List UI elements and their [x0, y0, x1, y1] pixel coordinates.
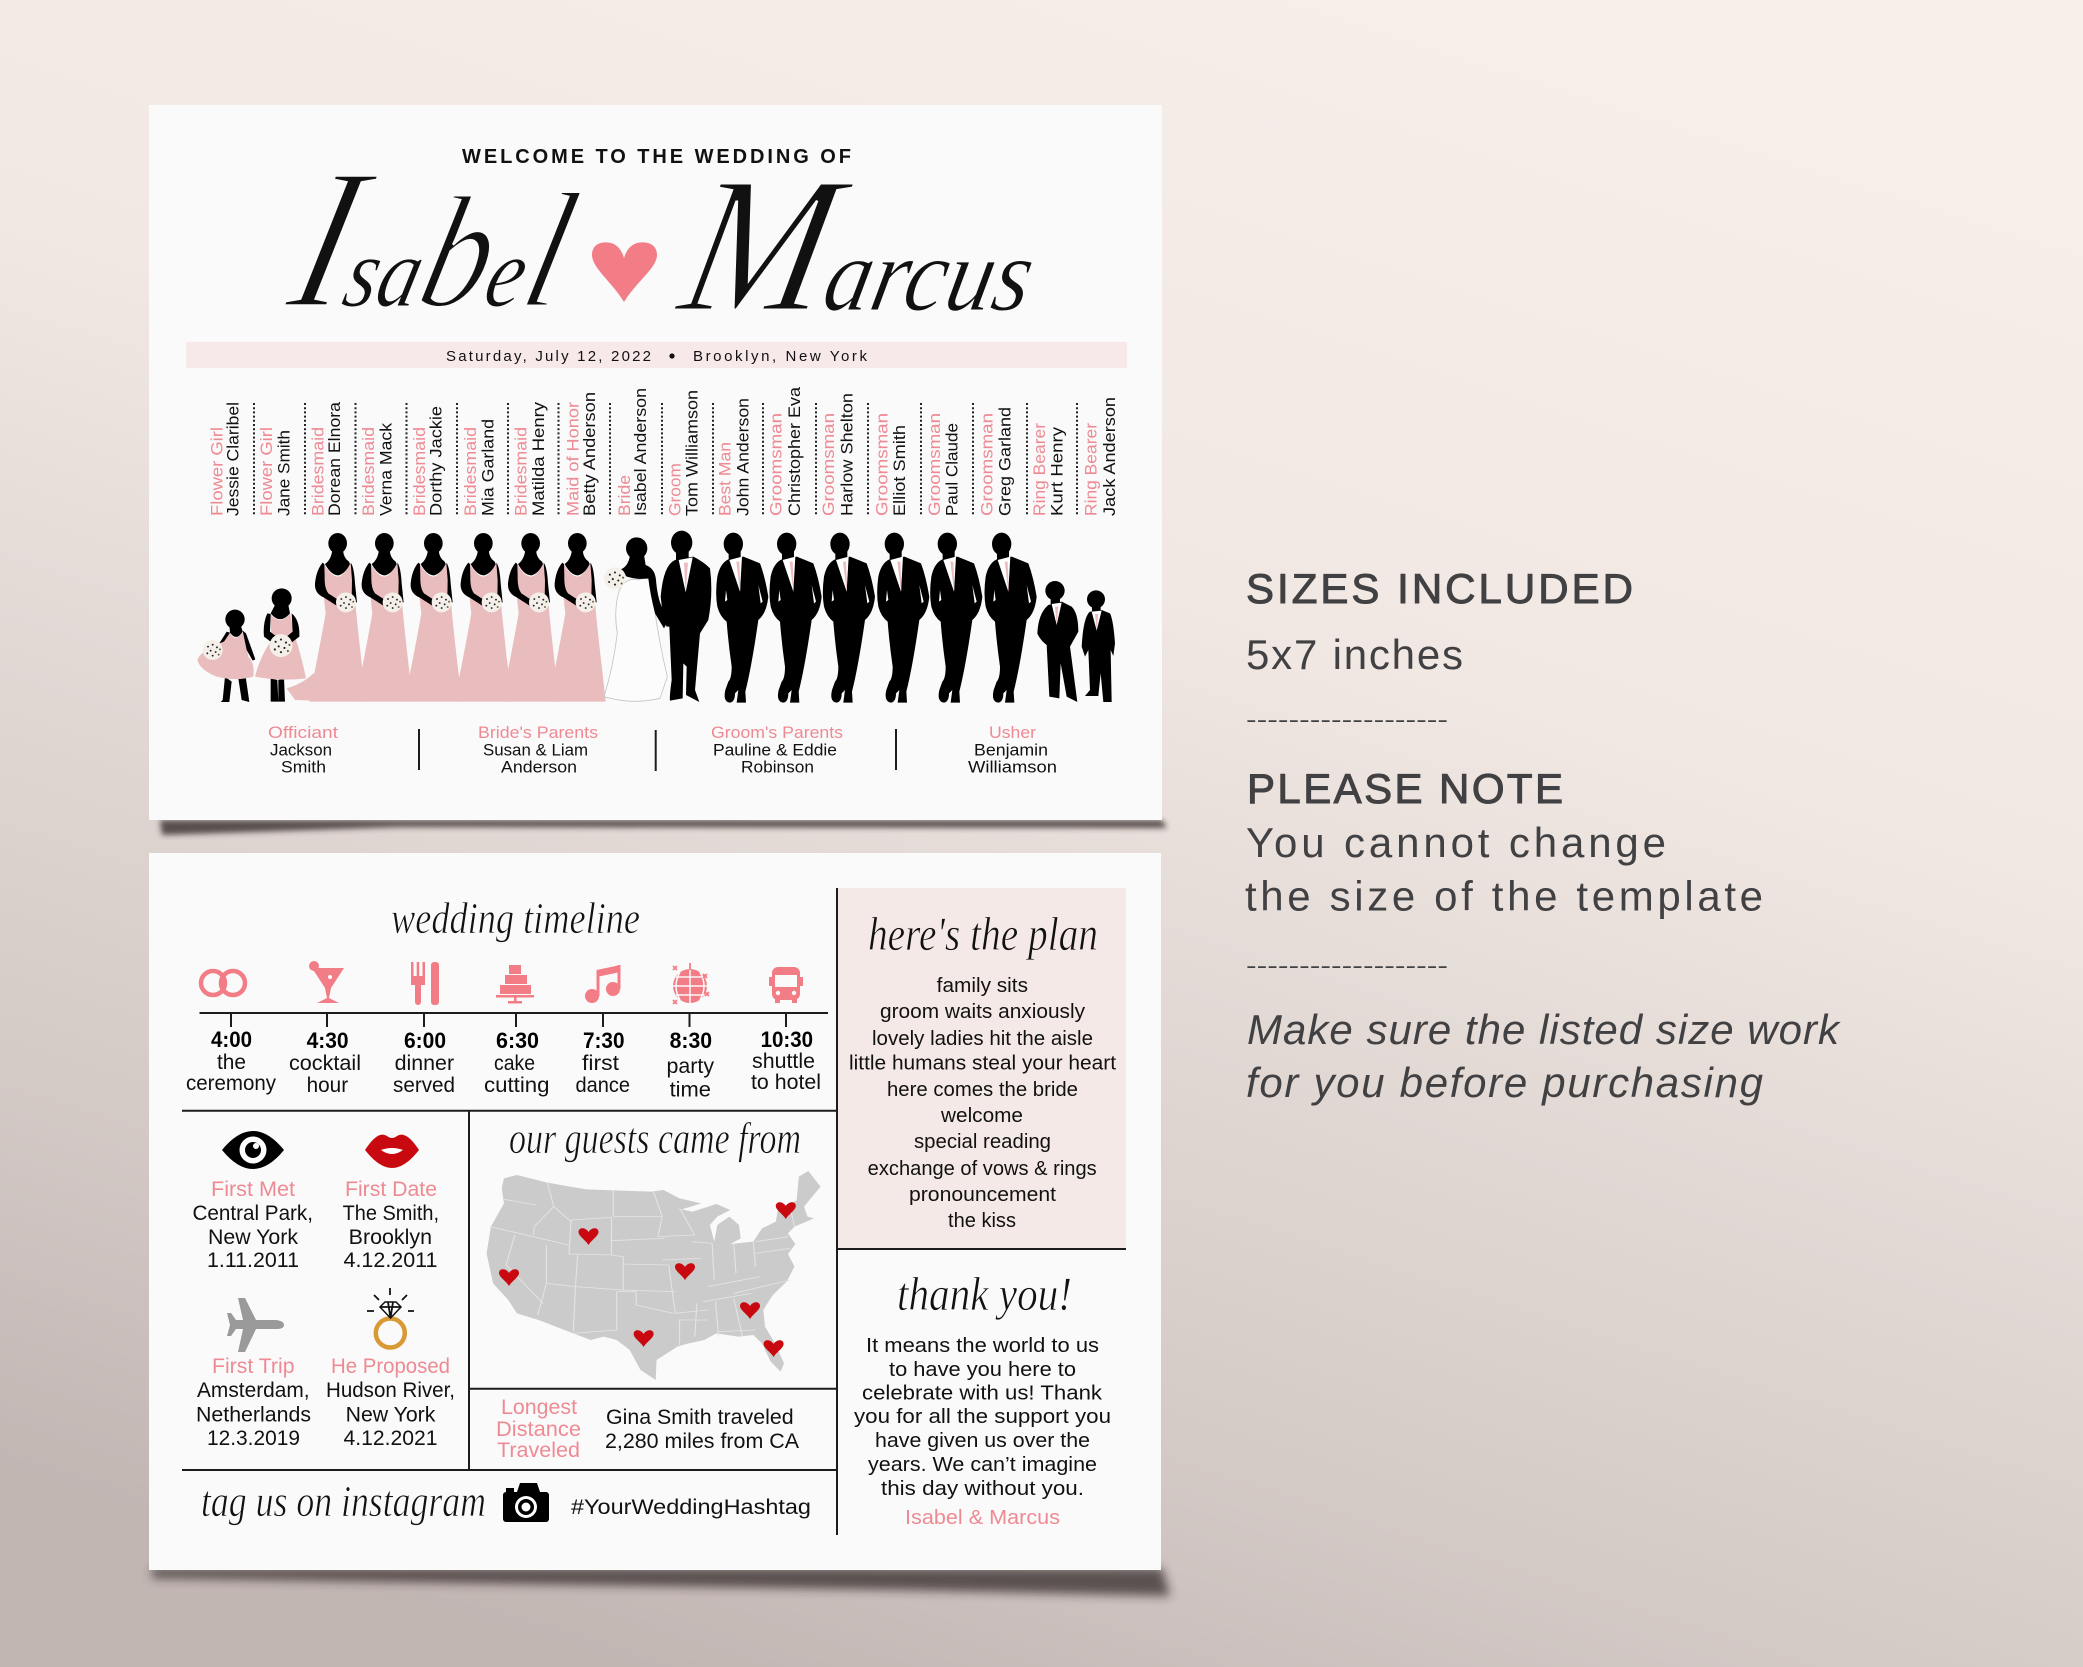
wedding party names — [209, 386, 1119, 516]
text: plan list: little humans steal your heart — [849, 1052, 1116, 1074]
heading: tag us on instagram: tag us on instagram — [201, 1477, 486, 1526]
side text: purchase reminder — [1246, 1006, 1841, 1106]
icon: plane — [227, 1298, 284, 1352]
text: thank you message: celebrate with us! Thank — [862, 1382, 1103, 1404]
text: thank you message: to have you here to — [889, 1359, 1076, 1381]
text: thank you message: this day without you. — [881, 1478, 1084, 1500]
text: plan list: exchange of vows & rings — [868, 1158, 1097, 1180]
icon: music note — [585, 965, 620, 1003]
officiant: Officiant — [268, 723, 338, 742]
timeline: 6:30: cutting — [484, 1074, 550, 1097]
silhouette: bridesmaid — [502, 533, 559, 702]
side text: please note — [1245, 765, 1763, 978]
story: first date — [343, 1178, 439, 1272]
icon: engagement ring — [367, 1288, 414, 1348]
wedding party names: Matilda Henry — [530, 401, 548, 516]
officiant: Jackson — [270, 741, 332, 760]
text: thank you message: you for all the support you — [854, 1406, 1111, 1428]
groom's parents: Groom's Parents — [711, 723, 843, 742]
wedding party names: Bride — [616, 475, 634, 516]
timeline: 10:30 — [751, 1027, 821, 1094]
text: thank you message: years. We can’t imagine — [868, 1454, 1097, 1476]
icon: rings — [201, 971, 245, 995]
timeline: 7:30: first — [582, 1052, 619, 1075]
silhouette: bridesmaid — [405, 533, 462, 702]
silhouette: ring bearer two — [1082, 590, 1115, 702]
groom's parents: Robinson — [741, 758, 814, 776]
text: plan list: here comes the bride — [887, 1079, 1078, 1101]
heading: our guests came from: our guests came from — [509, 1114, 801, 1163]
timeline: 6:30: 6:30 — [496, 1028, 539, 1053]
longest distance label — [496, 1396, 581, 1462]
timeline: 8:30: 8:30 — [670, 1028, 712, 1053]
longest distance text: Gina Smith traveled — [606, 1406, 794, 1429]
date band — [186, 342, 1127, 368]
text: plan list: pronouncement — [909, 1184, 1056, 1206]
text: plan list: welcome — [940, 1105, 1023, 1127]
silhouettes: bridal party — [197, 533, 668, 702]
icon: cocktail — [309, 961, 344, 1003]
story: first met: First Met — [211, 1178, 295, 1201]
wedding party names: Best Man — [717, 442, 735, 516]
timeline: 10:30: shuttle — [752, 1050, 815, 1073]
wedding party names: Mia Garland — [479, 419, 497, 516]
text: plan list: family sits — [937, 975, 1028, 997]
side text: please note: ------------------- — [1246, 953, 1448, 978]
title: groom name: Marcus — [663, 138, 1062, 353]
usher: Benjamin — [974, 741, 1048, 760]
usher — [968, 723, 1057, 776]
wedding party names: Elliot Smith — [891, 425, 909, 516]
story: first date: Brooklyn — [349, 1226, 432, 1249]
story: he proposed: Hudson River, — [326, 1379, 455, 1402]
wedding party names: Groomsman — [873, 413, 891, 516]
story: first trip: Amsterdam, — [197, 1379, 310, 1402]
silhouette: groomsman — [769, 533, 822, 703]
timeline: 10:30: 10:30 — [761, 1027, 813, 1052]
timeline: 6:00 — [393, 1028, 455, 1097]
wedding party names: Dorthy Jackie — [428, 406, 446, 516]
officiant — [268, 723, 338, 776]
wedding party names: Paul Claude — [943, 423, 961, 516]
side text: purchase reminder: Make sure the listed size work — [1247, 1006, 1841, 1053]
story: first date: The Smith, — [343, 1202, 439, 1225]
silhouette: bride — [604, 537, 668, 701]
wedding party names: Ring Bearer — [1031, 422, 1049, 516]
story: first date: First Date — [345, 1178, 437, 1201]
wedding party names: Jack Anderson — [1101, 397, 1119, 516]
wedding party names: Bridesmaid — [309, 427, 327, 516]
side text: please note: PLEASE NOTE — [1247, 765, 1563, 812]
silhouette: flower girl one — [197, 610, 255, 702]
heading: here's the plan: here's the plan — [868, 908, 1098, 961]
wedding party names: John Anderson — [734, 398, 752, 516]
silhouette: flower girl two — [255, 588, 306, 702]
timeline: 4:30 — [289, 1028, 361, 1097]
bride's parents: Susan & Liam — [483, 741, 588, 760]
longest distance label: Traveled — [497, 1439, 580, 1462]
wedding party names: Isabel Anderson — [632, 388, 650, 516]
side text: sizes included — [1246, 565, 1633, 732]
longest distance text — [605, 1406, 799, 1453]
bride's parents: Anderson — [501, 758, 577, 776]
longest distance label: Distance — [496, 1418, 581, 1441]
bride's parents: Bride's Parents — [478, 723, 598, 742]
groom's parents: Pauline & Eddie — [713, 741, 837, 760]
wedding party names: Betty Anderson — [581, 392, 599, 516]
timeline: 4:30: cocktail — [289, 1052, 361, 1075]
panel: here's the plan background — [838, 888, 1126, 1249]
bride's parents — [478, 723, 598, 776]
hashtag: #YourWeddingHashtag — [571, 1496, 811, 1519]
panel: front card — [149, 105, 1162, 820]
silhouette: bridesmaid — [356, 533, 413, 702]
card shadow: bottom — [152, 1568, 1170, 1596]
wedding party names: Bridesmaid — [462, 427, 480, 516]
wedding party names: Jessie Claribel — [224, 402, 242, 516]
timeline: 4:00: ceremony — [186, 1072, 276, 1095]
silhouette: groomsman — [930, 533, 982, 703]
timeline: 4:00: the — [217, 1051, 246, 1074]
story: he proposed: He Proposed — [331, 1355, 450, 1378]
heading: thank you: thank you! — [897, 1268, 1072, 1321]
wedding party names: Christopher Eva — [786, 386, 804, 516]
silhouette: groomsman — [823, 533, 875, 703]
silhouette: best man — [716, 533, 768, 703]
side text: sizes included: 5x7 inches — [1246, 631, 1463, 678]
side text: sizes included: ------------------- — [1246, 707, 1448, 732]
wedding party names: Dorean Elnora — [326, 401, 344, 516]
silhouette: train — [287, 673, 347, 702]
wedding party names: Kurt Henry — [1049, 426, 1067, 516]
text: plan list: the kiss — [948, 1210, 1016, 1232]
timeline: 4:00 — [186, 1027, 276, 1095]
usher: Williamson — [968, 758, 1057, 776]
silhouette: bridesmaid — [309, 533, 366, 702]
side text: sizes included: SIZES INCLUDED — [1246, 565, 1633, 612]
wedding party names: Ring Bearer — [1083, 422, 1101, 516]
silhouette: groomsman — [877, 533, 929, 703]
text: plan list: groom waits anxiously — [880, 1001, 1085, 1023]
chart: us guest map — [487, 1171, 821, 1380]
map pins: hearts — [499, 1202, 796, 1357]
heading: welcome: WELCOME TO THE WEDDING OF — [462, 146, 851, 168]
story: first date: 4.12.2011 — [344, 1249, 438, 1272]
icon: camera — [503, 1483, 549, 1522]
text: plan list — [849, 975, 1116, 1232]
silhouette: ring bearer one — [1037, 581, 1078, 702]
side text: please note: You cannot change — [1246, 819, 1666, 866]
wedding party names: Groomsman — [820, 413, 838, 516]
timeline: 6:30: cake — [494, 1052, 535, 1075]
date band: Saturday, July 12, 2022 — [446, 348, 651, 365]
story: first trip — [196, 1355, 311, 1450]
timeline: 6:00: 6:00 — [404, 1028, 446, 1053]
wedding party names: Jane Smith — [275, 430, 293, 516]
timeline: 8:30: party — [666, 1055, 715, 1078]
wedding party names: Groomsman — [926, 413, 944, 516]
officiant: Smith — [281, 758, 326, 776]
icon: heart — [592, 242, 657, 302]
silhouette: maid of honor — [549, 533, 606, 702]
wedding party names: Harlow Shelton — [838, 393, 856, 516]
story: first met: Central Park, — [192, 1202, 313, 1225]
wedding party names: Bridesmaid — [513, 427, 531, 516]
silhouette: bridesmaid — [455, 533, 512, 702]
wedding party names: Bridesmaid — [360, 427, 378, 516]
story: first trip: Netherlands — [196, 1404, 311, 1427]
longest distance label: Longest — [501, 1396, 577, 1419]
icon: fork and knife — [411, 962, 439, 1005]
wedding party names: Verna Mack — [377, 422, 395, 516]
wedding party names: Flower Girl — [258, 427, 276, 516]
wedding party names: Bridesmaid — [411, 427, 429, 516]
text: plan list: lovely ladies hit the aisle — [872, 1028, 1093, 1050]
side text: please note: the size of the template — [1245, 872, 1763, 920]
usher: Usher — [989, 723, 1036, 742]
wedding party names: Tom Williamson — [683, 390, 701, 516]
text: plan list: special reading — [914, 1131, 1051, 1153]
timeline: 7:30 — [576, 1028, 630, 1097]
groom's parents — [711, 723, 843, 776]
text: thank you message — [854, 1335, 1111, 1529]
wedding party names: Groomsman — [768, 413, 786, 516]
icon: cake — [496, 965, 534, 1004]
text: thank you message: Isabel & Marcus — [905, 1507, 1060, 1529]
wedding party names: Groom — [667, 463, 685, 516]
story: he proposed — [326, 1355, 455, 1450]
date band: Brooklyn, New York — [693, 348, 868, 365]
timeline: 4:30: 4:30 — [307, 1028, 349, 1053]
wedding party names: Flower Girl — [209, 427, 227, 516]
longest distance text: 2,280 miles from CA — [605, 1430, 799, 1453]
timeline: 6:00: served — [393, 1074, 455, 1097]
story: first trip: 12.3.2019 — [207, 1427, 300, 1450]
silhouettes: groom party — [661, 531, 1115, 703]
icon: bus — [769, 967, 803, 1003]
timeline: 8:30 — [666, 1028, 715, 1102]
icon: disco ball — [673, 963, 709, 1004]
title: bride name: Isabel — [272, 128, 600, 349]
timeline axis — [200, 1013, 828, 1027]
text: thank you message: It means the world to us — [866, 1335, 1099, 1357]
silhouette: groom — [661, 531, 711, 702]
icon: eye — [222, 1131, 284, 1169]
silhouette: groomsman — [984, 533, 1037, 703]
timeline: 7:30: 7:30 — [583, 1028, 624, 1053]
heading: wedding timeline: wedding timeline — [391, 894, 640, 943]
timeline: 6:30 — [484, 1028, 550, 1097]
timeline: 7:30: dance — [576, 1074, 630, 1097]
story: he proposed: 4.12.2021 — [344, 1427, 438, 1450]
wedding party names: Groomsman — [979, 413, 997, 516]
timeline: 6:00: dinner — [395, 1052, 454, 1075]
story: first met: 1.11.2011 — [207, 1249, 299, 1272]
icon: lips — [365, 1135, 419, 1168]
wedding party names: Greg Garland — [997, 407, 1015, 516]
timeline: 10:30: to hotel — [751, 1071, 821, 1094]
wedding party names: Maid of Honor — [564, 401, 582, 516]
panel: back card — [149, 853, 1161, 1570]
text: thank you message: have given us over the — [875, 1430, 1090, 1452]
card shadow: top — [160, 820, 1167, 835]
side text: purchase reminder: for you before purchasing — [1246, 1059, 1763, 1106]
timeline: 4:00: 4:00 — [211, 1027, 252, 1052]
story: he proposed: New York — [346, 1404, 436, 1427]
timeline: 8:30: time — [670, 1079, 711, 1102]
story: first trip: First Trip — [212, 1355, 294, 1378]
story: first met — [192, 1178, 313, 1272]
timeline: 4:30: hour — [307, 1074, 348, 1097]
story: first met: New York — [208, 1226, 299, 1249]
